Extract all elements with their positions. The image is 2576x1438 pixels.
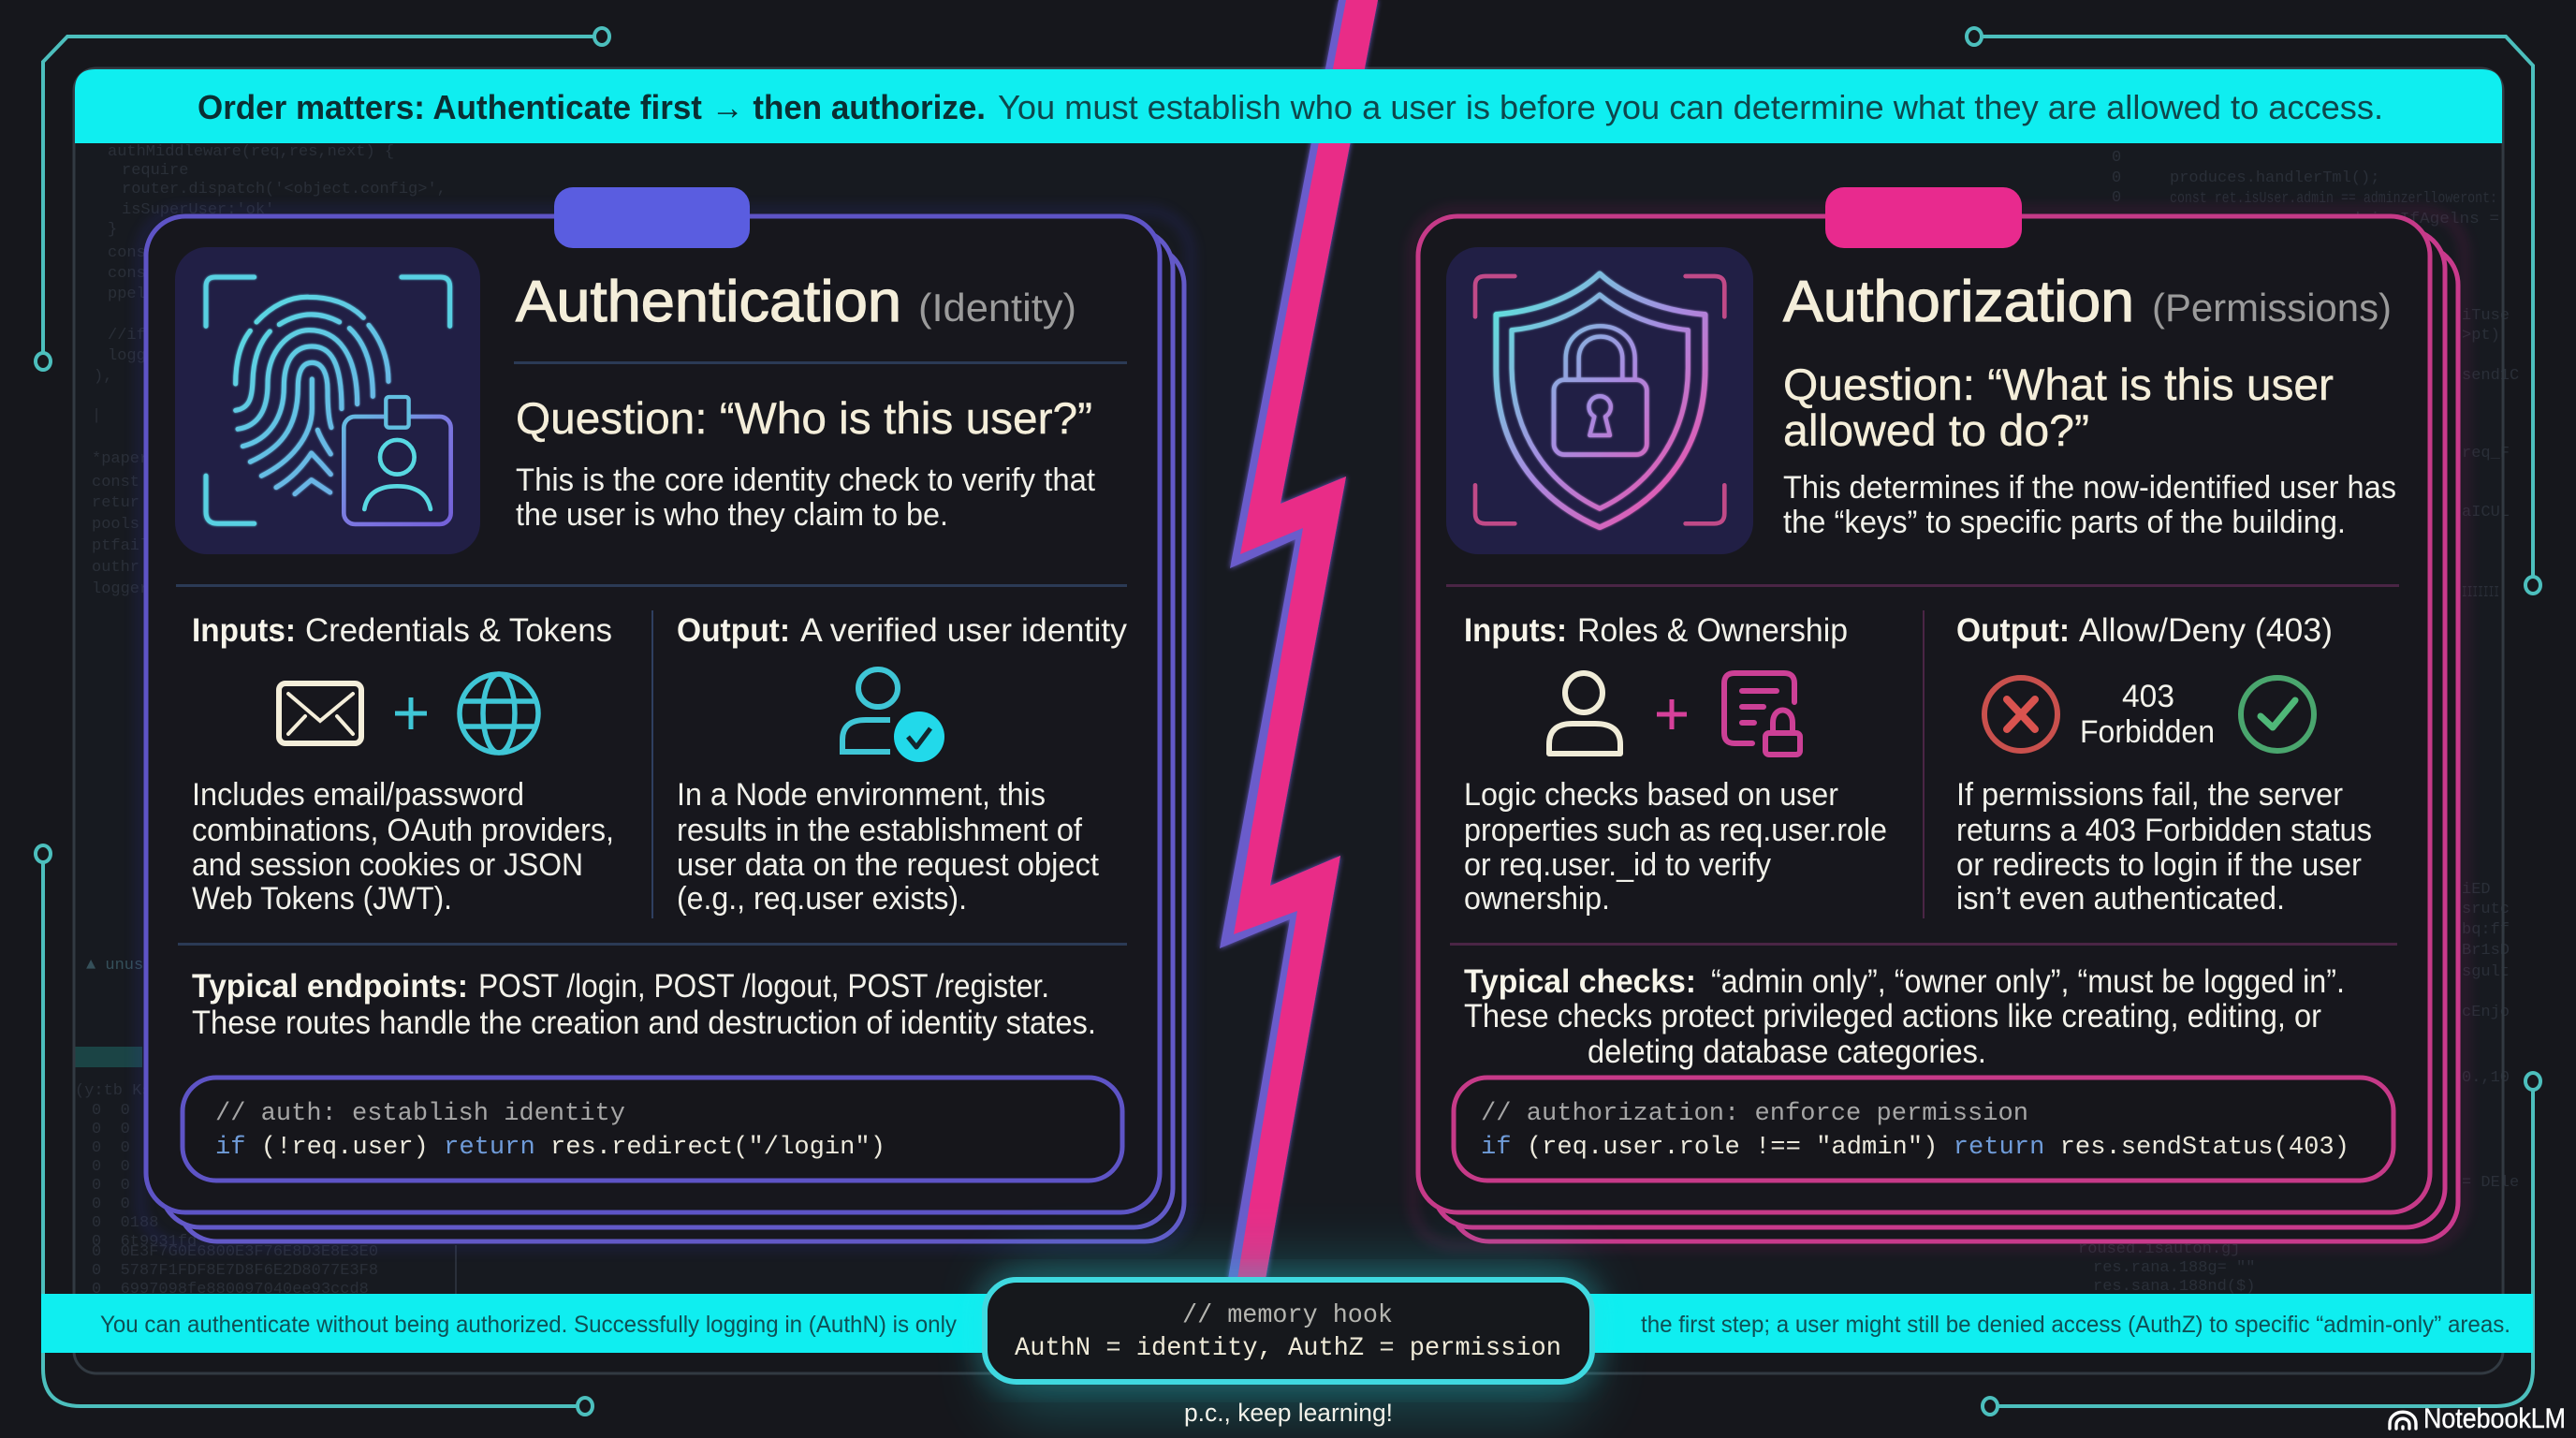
text: aICUL <box>2462 504 2510 521</box>
text: Br1sD <box>2462 942 2510 960</box>
text: retur <box>92 494 139 512</box>
text: srutc <box>2462 901 2510 918</box>
text: output detail: (e.g., req.user exists). <box>677 881 967 917</box>
text: const <box>92 474 139 492</box>
text: inputs detail: ownership. <box>1464 881 1610 917</box>
text: logger <box>92 580 149 598</box>
signoff text: p.c., keep learning! <box>1184 1399 1393 1427</box>
text: 0 6997098fe880097040ee93ccd8 <box>92 1281 369 1299</box>
text: inputs detail <box>192 777 614 917</box>
text: require <box>122 162 188 180</box>
question: authentication: Question: “Who is this user?” <box>516 393 1092 443</box>
text: req_F <box>2462 445 2510 462</box>
text: produces.handlerTml(); <box>2170 169 2379 187</box>
output heading: A verified user identity <box>800 612 1127 649</box>
text: 0 <box>2112 149 2121 167</box>
callout: memory hook: // memory hook <box>1182 1301 1393 1330</box>
text: iED <box>2462 881 2491 899</box>
text: send1C <box>2462 367 2519 385</box>
text: inputs detail <box>1464 777 1887 917</box>
footer strip: left <box>41 1294 992 1353</box>
text: inputs detail: or req.user._id to verify <box>1464 847 1771 883</box>
text: typical checks <box>1464 963 2345 1070</box>
text: 0 0 <box>92 1102 130 1120</box>
text: logger <box>108 347 165 365</box>
text: adminzIfAgelns = <box>2340 211 2499 228</box>
label: 403 Forbidden: 403 <box>2122 679 2174 714</box>
text: sgult <box>2462 963 2510 981</box>
code box: authentication: if (!req.user) return res.redirect("/login") <box>215 1134 886 1162</box>
circuit trace: bottom right <box>1983 1073 2540 1415</box>
text: inputs detail: and session cookies or JSON <box>192 847 583 883</box>
text: typical endpoints: These routes handle the creation and destruction of identity states. <box>192 1005 1096 1041</box>
text: output detail: returns a 403 Forbidden status <box>1956 813 2372 848</box>
text: 0 5787F1FDF8E7D8F6E2D8077E3F8 <box>92 1262 378 1280</box>
text: typical checks: deleting database categories. <box>1588 1034 1986 1070</box>
text: ptfail <box>92 537 149 555</box>
text: 0 0 <box>92 1177 130 1195</box>
text: 0 0 <box>92 1158 130 1176</box>
output heading <box>1956 612 2333 649</box>
description: authorization <box>1783 470 2396 540</box>
tab: authorization <box>1825 187 2022 248</box>
text: const <box>108 244 155 262</box>
text: output detail: or redirects to login if the user <box>1956 847 2362 883</box>
callout: memory hook: AuthN = identity, AuthZ = permission <box>1015 1334 1561 1363</box>
text: (y:tb Ksep <box>75 1082 170 1100</box>
text: output detail <box>677 777 1100 917</box>
text: pools <box>92 516 139 534</box>
panel: authorization <box>1412 187 2465 1246</box>
text: typical endpoints: Typical endpoints: <box>192 968 468 1005</box>
text: //if <box>108 327 146 345</box>
heading: authorization: (Permissions) <box>2152 286 2392 330</box>
text: 0 0 <box>92 1139 130 1157</box>
text: ), <box>94 368 112 386</box>
footer strip: right <box>1582 1294 2533 1353</box>
inputs heading: Roles & Ownership <box>1577 612 1848 649</box>
description: authentication: the user is who they claim to be. <box>516 497 948 533</box>
text: iTuse <box>2462 307 2510 325</box>
text: 0 6t9931fd <box>92 1233 197 1251</box>
top banner <box>75 69 2502 143</box>
text: 0 0E3F7G0E6800E3F76E8D3E8E3E0 <box>92 1243 378 1261</box>
text: *paper <box>92 450 149 468</box>
inputs heading: Inputs: <box>192 612 296 649</box>
inputs heading <box>1464 612 1848 649</box>
icon: globe <box>460 674 538 753</box>
icon: shield and padlock <box>1446 247 1753 554</box>
text: 0 0188 <box>92 1214 158 1232</box>
code box: authentication: // auth: establish identity <box>215 1100 625 1128</box>
text: ▲ unused <box>86 957 163 975</box>
icon: plus <box>395 697 427 729</box>
text: output detail: user data on the request object <box>677 847 1100 883</box>
text: authMiddleware(req,res,next) { <box>108 143 394 161</box>
question: authorization: allowed to do?” <box>1783 405 2089 455</box>
text: typical endpoints: POST /login, POST /logout, POST /register. <box>478 968 1049 1005</box>
text: inputs detail: properties such as req.user.role <box>1464 813 1887 848</box>
text: typical checks: Typical checks: <box>1464 963 1696 1000</box>
footer strip: left: You can authenticate without being authorized. Successfully logging in (AuthN) is only <box>100 1312 957 1338</box>
text: output detail: If permissions fail, the server <box>1956 777 2343 813</box>
panel: authentication <box>140 187 1191 1246</box>
text: cEnjo <box>2462 1004 2510 1021</box>
text: inputs detail: Logic checks based on user <box>1464 777 1838 813</box>
question: authorization: Question: “What is this user <box>1783 360 2334 409</box>
heading: authentication: Authentication <box>516 270 901 334</box>
text: inputs detail: Includes email/password <box>192 777 524 813</box>
code box: authorization: if (req.user.role !== "admin") return res.sendStatus(403) <box>1481 1134 2349 1162</box>
text: output detail <box>1956 777 2372 917</box>
icon: fingerprint and ID badge <box>175 247 480 554</box>
output heading: Allow/Deny (403) <box>2079 612 2333 649</box>
text: outhr <box>92 559 139 577</box>
text: isSuperUser:'ok' <box>122 201 274 219</box>
description: authentication <box>516 462 1096 533</box>
text: output detail: results in the establishment of <box>677 813 1083 848</box>
text: 0 <box>2112 189 2121 207</box>
heading: authorization <box>1783 270 2392 334</box>
description: authentication: This is the core identity check to verify that <box>516 462 1096 498</box>
inputs heading: Credentials & Tokens <box>305 612 612 649</box>
text: 0.,10 <box>2462 1069 2510 1087</box>
text: inputs detail: combinations, OAuth providers, <box>192 813 614 848</box>
label: 403 Forbidden <box>2080 679 2215 750</box>
footer strip: right: the first step; a user might still be denied access (AuthZ) to specific “admin-only” areas. <box>1641 1312 2510 1338</box>
description: authorization: This determines if the now-identified user has <box>1783 470 2396 506</box>
description: authorization: the “keys” to specific parts of the building. <box>1783 505 2346 540</box>
text: typical checks: These checks protect privileged actions like creating, editing, or <box>1464 998 2321 1034</box>
circuit trace: bottom left <box>36 845 593 1415</box>
output heading: Output: <box>677 612 790 649</box>
tab: authentication <box>554 187 750 248</box>
label: 403 Forbidden: Forbidden <box>2080 714 2215 750</box>
text: output detail: isn’t even authenticated. <box>1956 881 2285 917</box>
text: | <box>92 407 101 425</box>
text: typical endpoints <box>192 968 1096 1041</box>
icon: allow circle <box>2241 678 2314 751</box>
text: res.sana.188nd($) <box>2093 1278 2255 1296</box>
banner text: Order matters: Authenticate first → then authorize. <box>198 88 986 126</box>
text: 0 0 <box>92 1196 130 1213</box>
inputs heading: Inputs: <box>1464 612 1567 649</box>
circuit trace: top left <box>36 28 609 370</box>
text: 0 0 <box>92 1121 130 1138</box>
text: roused.isauton.gj <box>2078 1240 2240 1258</box>
text: router.dispatch('<object.config>', <box>122 181 446 198</box>
icon: user <box>1549 673 1620 754</box>
output heading: Output: <box>1956 612 2070 649</box>
text: IIIIIII <box>2462 584 2499 602</box>
lightning bolt divider <box>1220 0 1378 1279</box>
question: authorization <box>1783 360 2334 455</box>
text: bq:ff <box>2462 921 2510 939</box>
callout: memory hook <box>985 1280 1592 1382</box>
code box: authorization: // authorization: enforce permission <box>1481 1100 2028 1128</box>
code box: authorization <box>1454 1078 2393 1181</box>
banner text <box>198 88 2383 126</box>
code box: authentication <box>183 1078 1122 1181</box>
text: const <box>108 265 155 283</box>
text: res.rana.188g= "" <box>2093 1259 2255 1277</box>
text: = DEle <box>2462 1174 2519 1192</box>
heading: authorization: Authorization <box>1783 270 2134 334</box>
text: output detail: In a Node environment, this <box>677 777 1046 813</box>
icon: deny circle <box>1984 678 2057 751</box>
heading: authentication: (Identity) <box>918 286 1076 330</box>
text: typical checks: “admin only”, “owner only”, “must be logged in”. <box>1711 963 2345 1000</box>
text: ppel <box>108 286 146 303</box>
icon: plus <box>1657 699 1687 729</box>
text: >pt) <box>2462 327 2500 345</box>
icon: verified user <box>842 669 944 762</box>
text: } <box>108 221 117 239</box>
icon: document with lock <box>1724 673 1800 755</box>
text: inputs detail: Web Tokens (JWT). <box>192 881 452 917</box>
heading: authentication <box>516 270 1076 334</box>
circuit trace: top right <box>1967 28 2540 594</box>
banner text: You must establish who a user is before you can determine what they are allowed to access. <box>998 88 2383 126</box>
icon: envelope <box>279 683 361 743</box>
text: 0 <box>2112 169 2121 187</box>
